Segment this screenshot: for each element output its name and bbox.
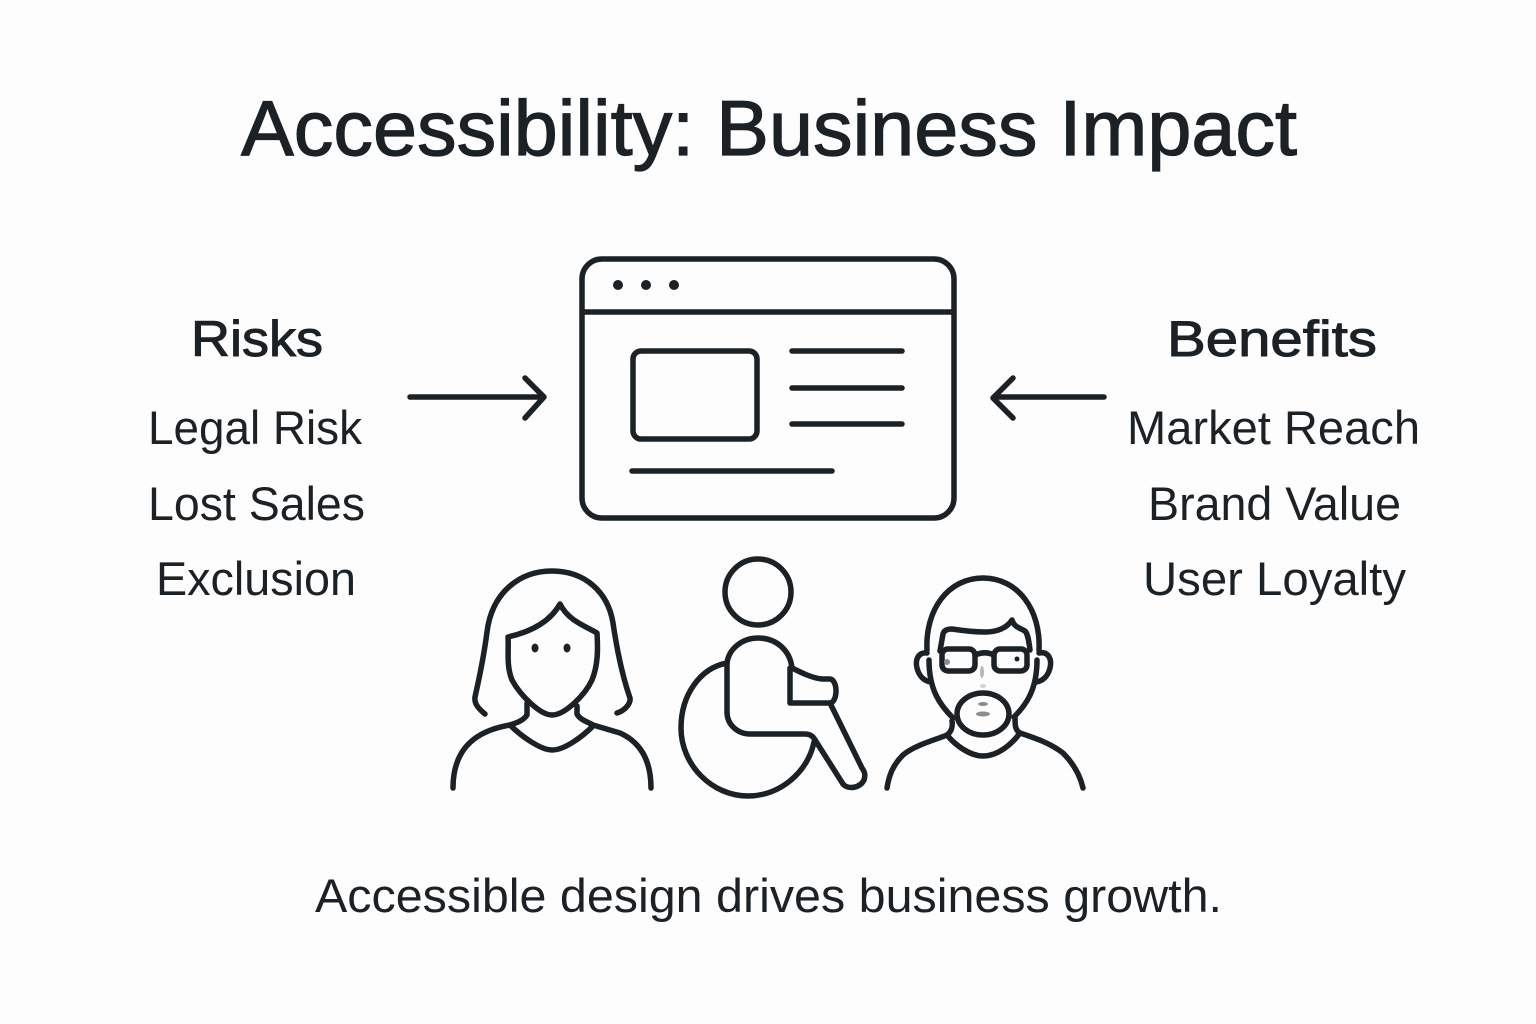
icon: wheelchair user: [681, 559, 865, 796]
tagline: Accessible design drives business growth.: [315, 869, 1222, 922]
icon: woman: [453, 571, 651, 788]
heading: risks: Risks: [191, 311, 323, 367]
risk item: exclusion: Exclusion: [156, 552, 356, 605]
panel: risks: [148, 311, 365, 605]
risk item: legal risk: Legal Risk: [148, 401, 362, 454]
benefit item: user loyalty: User Loyalty: [1143, 552, 1406, 605]
arrow: risks to website: [410, 378, 544, 418]
arrow: benefits to website: [993, 378, 1104, 418]
benefit item: brand value: Brand Value: [1148, 477, 1401, 530]
icon: man with glasses and beard: [887, 578, 1083, 788]
icon: browser window: [582, 259, 954, 518]
heading: benefits: Benefits: [1167, 311, 1377, 367]
benefit item: market reach: Market Reach: [1127, 401, 1420, 454]
panel: benefits: [1127, 311, 1420, 605]
risk item: lost sales: Lost Sales: [148, 477, 365, 530]
title: Accessibility: Business Impact: [241, 84, 1297, 172]
